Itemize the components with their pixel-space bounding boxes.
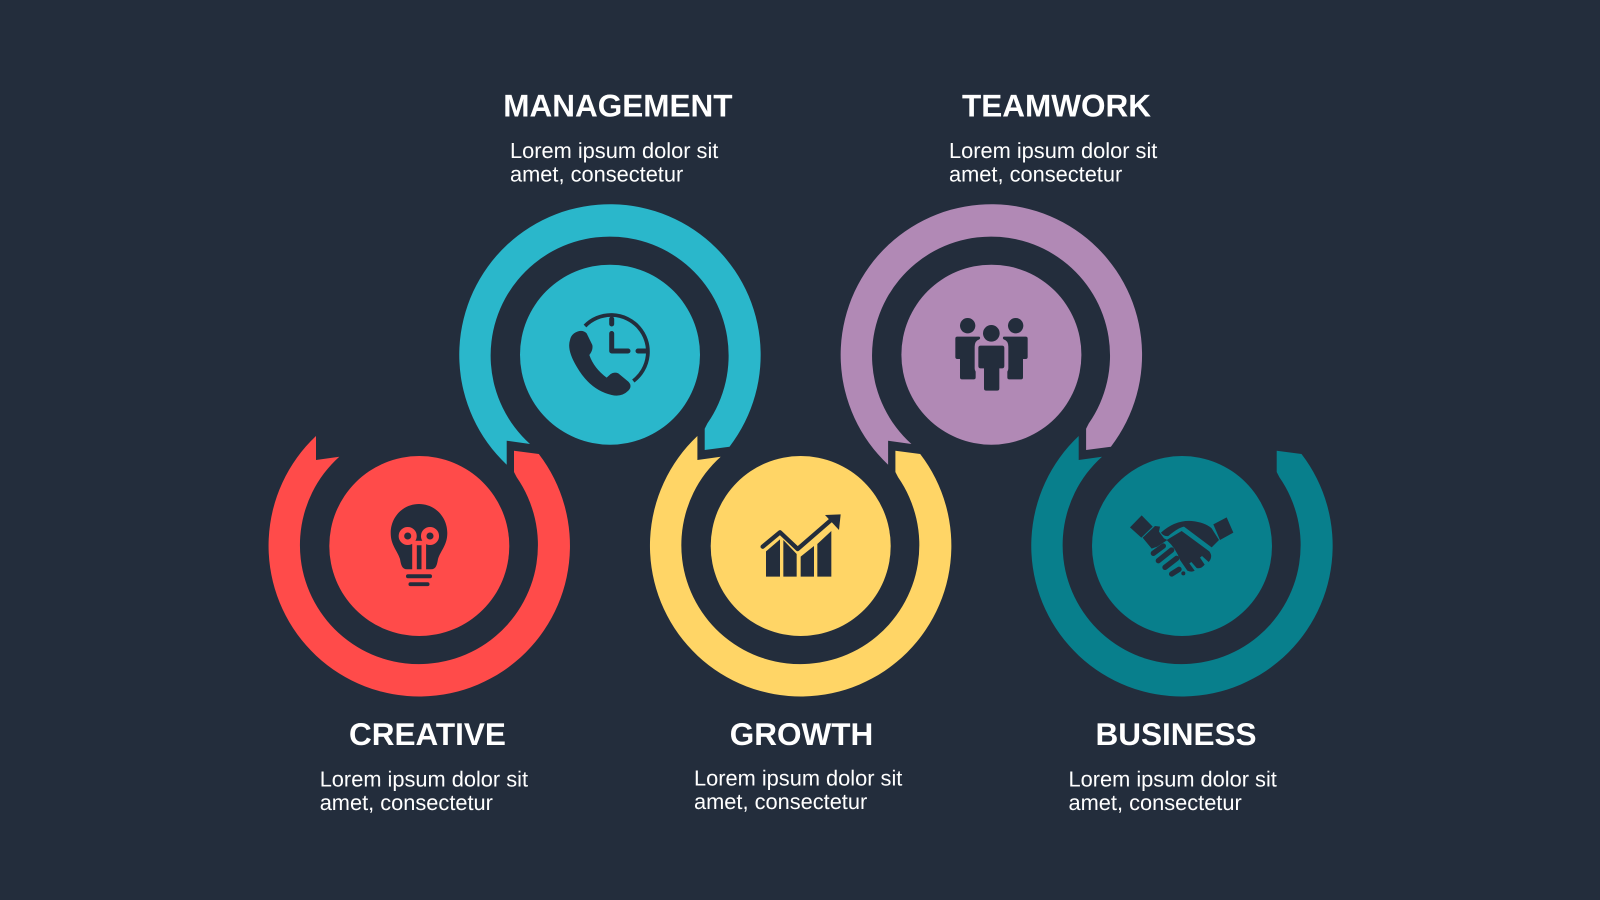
icon: rising chart <box>763 514 841 577</box>
creative description: Lorem ipsum dolor sit <box>320 766 528 792</box>
panel: business <box>1031 436 1333 815</box>
creative heading: CREATIVE <box>349 716 506 752</box>
management description: amet, consectetur <box>510 162 683 186</box>
teamwork inner circle <box>901 265 1081 445</box>
growth inner circle <box>711 456 891 636</box>
panel: management <box>459 88 761 465</box>
panel: creative <box>269 436 570 815</box>
teamwork ring arrow <box>841 204 1142 465</box>
creative inner circle <box>329 456 509 636</box>
teamwork description: Lorem ipsum dolor sit <box>949 138 1157 163</box>
panel: growth <box>650 436 951 814</box>
growth heading: GROWTH <box>730 716 873 752</box>
growth ring arrow <box>650 436 951 696</box>
teamwork heading: TEAMWORK <box>962 88 1151 124</box>
growth description: amet, consectetur <box>694 789 867 814</box>
teamwork description: amet, consectetur <box>949 162 1122 186</box>
icon: handshake <box>1130 515 1233 575</box>
business description: amet, consectetur <box>1068 790 1242 815</box>
creative description: amet, consectetur <box>320 790 493 815</box>
panel: teamwork <box>841 88 1157 465</box>
management inner circle <box>520 265 700 445</box>
business ring arrow <box>1031 436 1333 696</box>
management heading: MANAGEMENT <box>503 88 733 124</box>
management description: Lorem ipsum dolor sit <box>510 138 718 163</box>
business heading: BUSINESS <box>1096 716 1257 752</box>
business description: Lorem ipsum dolor sit <box>1068 766 1277 792</box>
icon: light bulb <box>391 504 447 586</box>
business inner circle <box>1092 456 1272 636</box>
icon: phone and clock <box>569 315 648 396</box>
icon: three people <box>955 318 1028 391</box>
creative ring arrow <box>269 436 570 696</box>
growth description: Lorem ipsum dolor sit <box>694 765 902 790</box>
management ring arrow <box>459 204 761 465</box>
